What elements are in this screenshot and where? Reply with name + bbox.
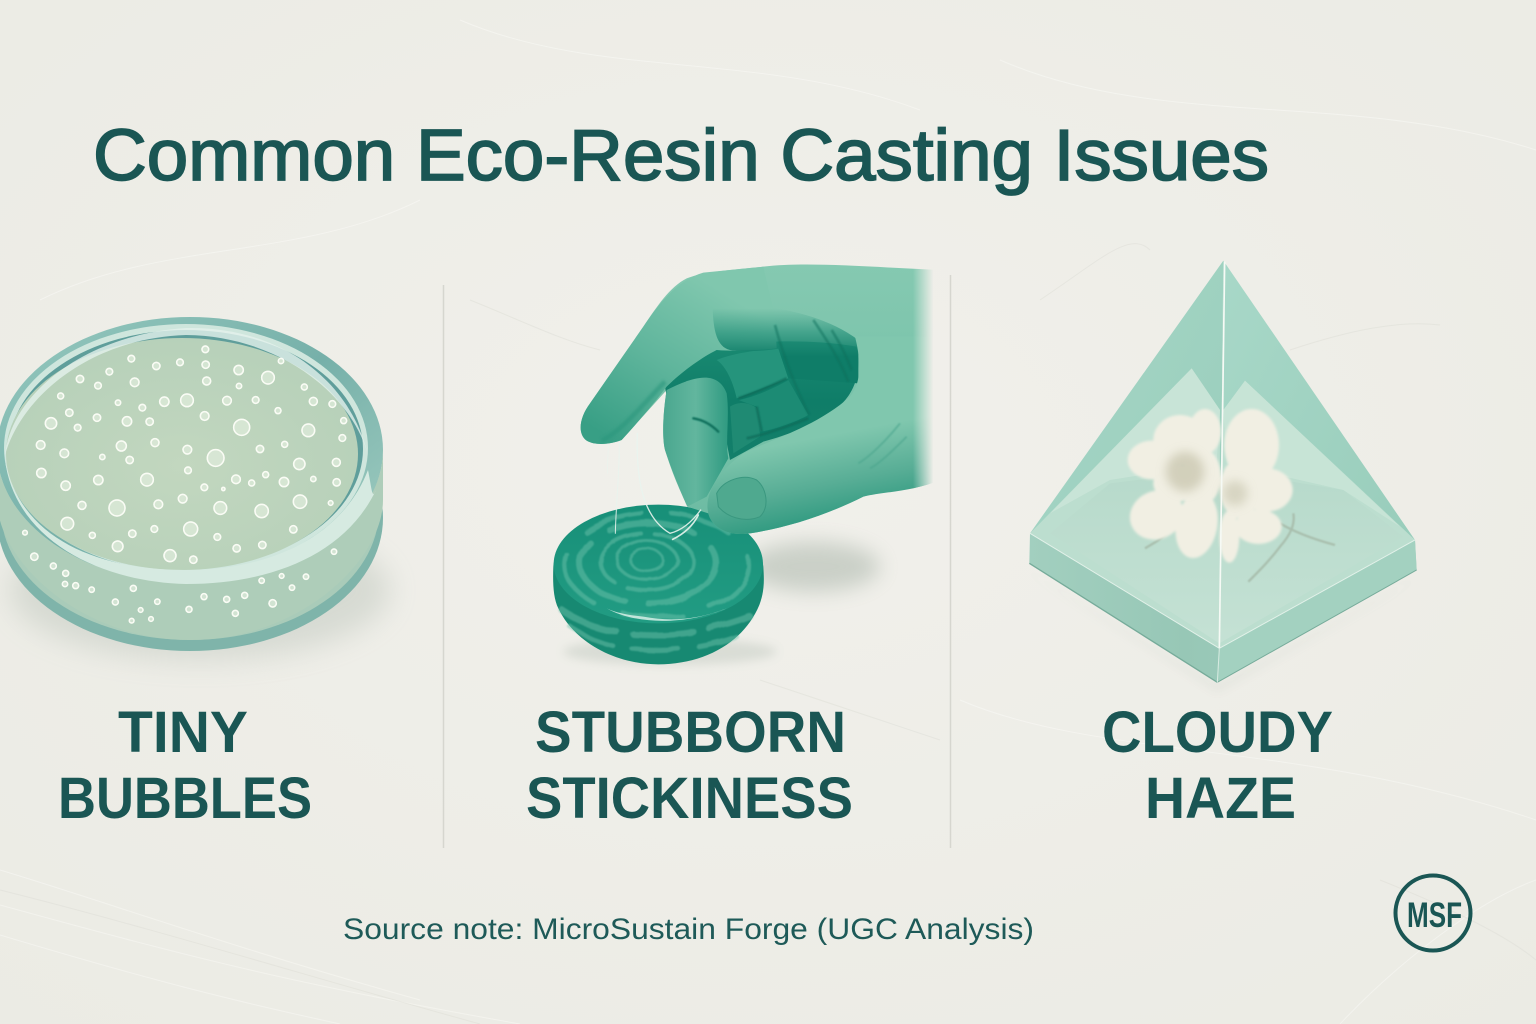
panel: tiny bubbles [0, 317, 390, 831]
divider: right [950, 275, 952, 848]
frosted floor [1030, 368, 1220, 648]
panel: stubborn stickiness [526, 265, 940, 831]
label: cloudy haze [1102, 700, 1333, 831]
icon: cloudy resin pyramid with flower [1020, 261, 1423, 690]
icon: gloved hand pulling sticky resin [553, 265, 940, 665]
label: cloudy haze: HAZE [1145, 766, 1296, 831]
icon: petri dish with bubbles [0, 317, 390, 660]
label: cloudy haze: CLOUDY [1102, 700, 1333, 765]
label: stubborn stickiness: STICKINESS [526, 766, 853, 831]
label: tiny bubbles: BUBBLES [58, 766, 312, 831]
label: tiny bubbles [58, 700, 312, 831]
dried stem [1145, 513, 1335, 582]
middle finger [663, 378, 728, 507]
base plate [1029, 533, 1417, 682]
index finger [581, 267, 777, 444]
panel: cloudy haze [1020, 261, 1423, 831]
sticky threads [607, 433, 701, 539]
label: stubborn stickiness: STUBBORN [535, 700, 846, 765]
source note: Source note: MicroSustain Forge (UGC Analysis) [343, 913, 1034, 946]
logo: MSF [1396, 876, 1470, 950]
pyramid faces [1030, 261, 1223, 648]
knuckle shadow [713, 306, 858, 383]
hand interior shadow [665, 341, 858, 460]
label: tiny bubbles: TINY [118, 700, 248, 765]
bubbles [23, 346, 347, 623]
glove [581, 265, 940, 534]
thumb [707, 337, 940, 534]
logo: MSF: MSF [1407, 896, 1462, 935]
title: Common Eco-Resin Casting Issues [93, 116, 1269, 196]
front edge highlight [1219, 262, 1225, 648]
resin puck [553, 505, 764, 664]
label: stubborn stickiness [526, 700, 853, 831]
thumbnail [717, 477, 766, 519]
flower [1122, 409, 1293, 563]
divider: left [442, 285, 444, 848]
